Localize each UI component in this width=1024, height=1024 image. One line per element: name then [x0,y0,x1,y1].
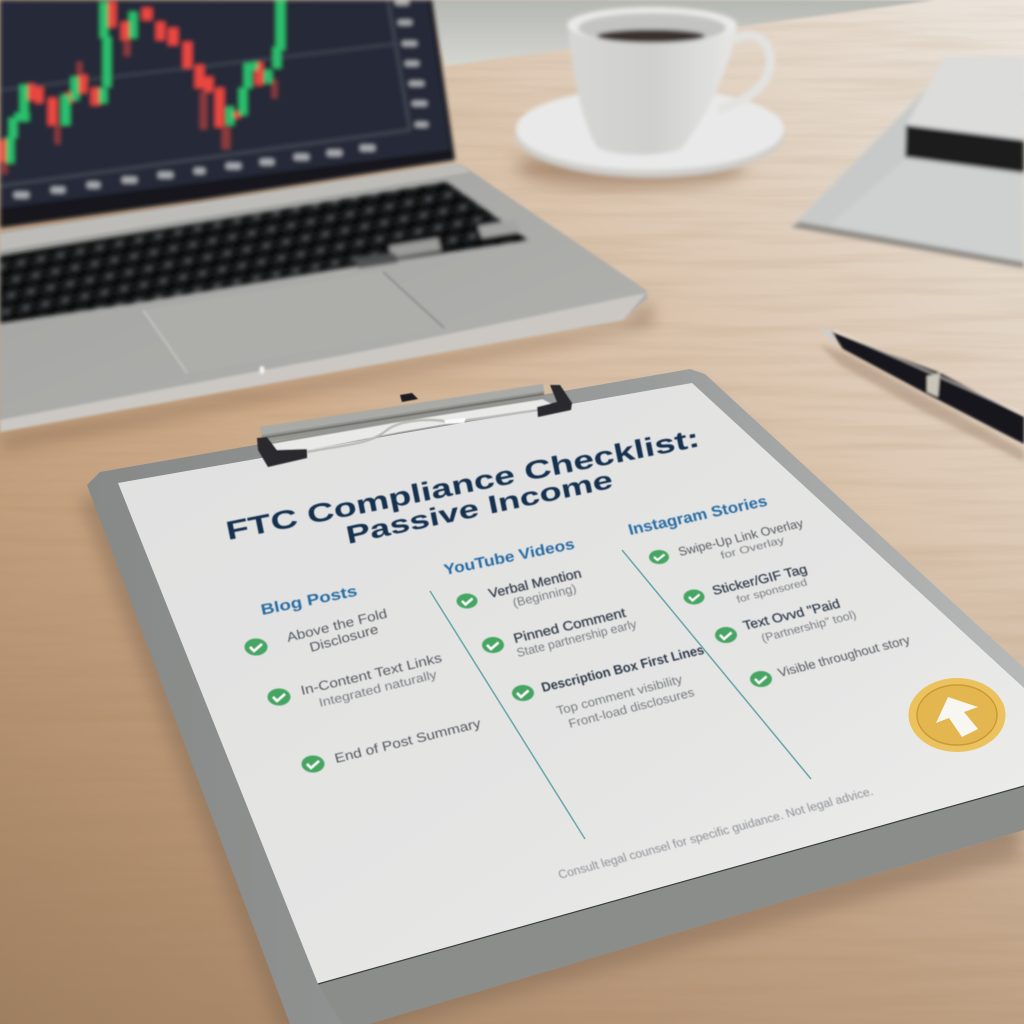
laptop base [0,163,648,432]
check: text overlay [715,627,737,643]
title: FTC Compliance Checklist: [223,422,702,546]
item: sticker gif tag: Sticker/GIF Tag [710,562,809,598]
item sub: front-load disclosures: Front-load disclosures [567,685,696,731]
item: in-content text links: In-Content Text Links [299,650,444,698]
laptop [0,0,655,452]
laptop screen [0,0,455,228]
column: blog posts [244,583,483,772]
clipboard board [87,369,1024,1024]
item: end of post summary: End of Post Summary [333,715,483,766]
clipboard [87,369,1024,1024]
candlesticks [0,2,263,162]
check: end of post summary [302,756,324,772]
icon: gold coin with up arrow [908,678,1006,752]
title: Passive Income [344,466,615,550]
check: swipe-up link [649,550,669,564]
check: visible throughout [750,671,772,687]
check: above the fold [244,638,268,656]
item sub: disclosure: Disclosure [308,621,380,655]
item: visible throughout story: Visible throughout story [776,633,913,680]
check: pinned comment [482,637,504,653]
title [223,422,702,550]
pen [818,327,1024,462]
keyboard [0,182,528,323]
item: pinned comment: Pinned Comment [512,605,628,646]
check: verbal mention [456,594,478,608]
paper sheet [118,383,1024,984]
clipboard shadow [79,380,1019,1024]
coffee cup and saucer [515,7,785,188]
check: description box [512,685,534,701]
trackpad [143,272,444,374]
item: above the fold: Above the Fold [285,606,389,645]
item sub: for overlay: for Overlay [719,535,787,562]
check: sticker tag [684,590,704,604]
column: youtube videos [442,536,706,731]
laptop shadow [0,300,655,452]
chart grid and axes [0,0,410,186]
column: instagram stories [626,493,913,687]
divider: youtube and instagram [622,550,811,779]
item sub: top comment visibility: Top comment visibility [555,672,685,718]
column: youtube videos: YouTube Videos [442,536,576,579]
item sub: integrated naturally: Integrated naturally [317,667,438,710]
check: in-content text links [268,688,290,706]
notebook and book stack [791,57,1024,268]
divider: blog and youtube [430,591,585,839]
item sub: state partnership early: State partnership early [515,617,638,660]
column: instagram stories: Instagram Stories [626,493,769,539]
clip [257,384,572,467]
column: blog posts: Blog Posts [259,583,359,619]
wall behind desk [430,0,936,66]
item: text overlay paid: Text Ovvd "Paid [741,597,842,633]
item: verbal mention: Verbal Mention [487,565,583,601]
item sub: partnership tool: (Partnership" tool) [760,609,858,645]
item: swipe-up link overlay: Swipe-Up Link Overlay [676,516,806,559]
item sub: for sponsored: for sponsored [735,577,809,606]
axis tick labels [14,0,428,198]
item: description box first lines: Description Box First Lines [539,642,706,695]
item sub: beginning: (Beginning) [511,581,578,610]
footer disclaimer: Consult legal counsel for specific guidance. Not legal advice. [556,785,875,882]
